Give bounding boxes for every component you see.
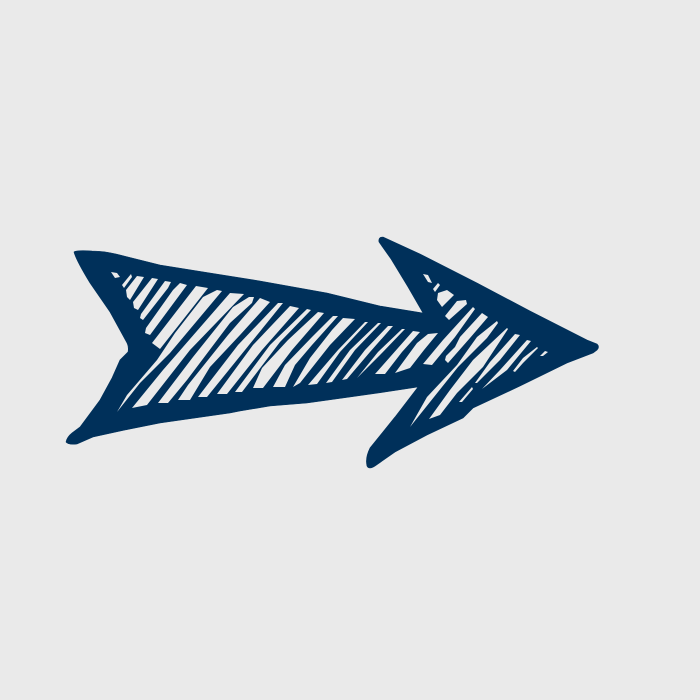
hatching: arrow head bbox=[410, 274, 548, 427]
icon: hand-drawn arrow pointing right bbox=[66, 237, 598, 468]
arrow outline bbox=[66, 237, 598, 468]
hatching: shaft and tail bbox=[111, 272, 438, 412]
